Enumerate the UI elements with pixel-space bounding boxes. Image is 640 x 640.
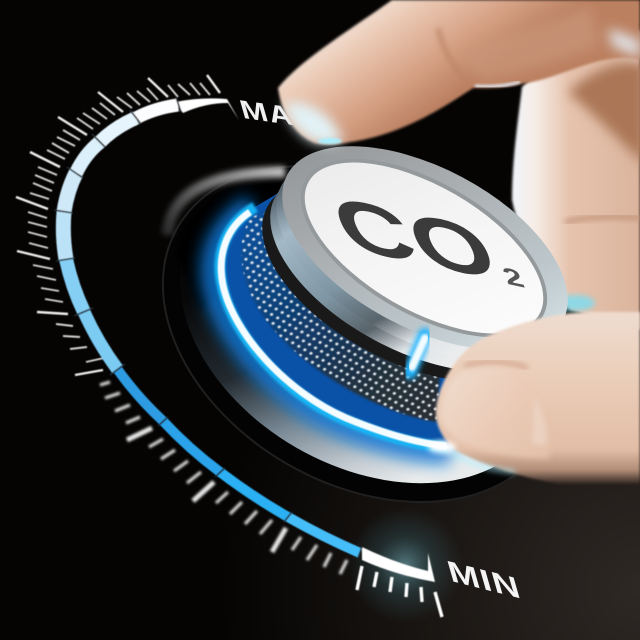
finger underside highlight bbox=[475, 82, 520, 86]
knob bbox=[230, 104, 600, 424]
indicator light glow bbox=[410, 335, 425, 372]
thumb nail bbox=[440, 368, 550, 458]
ring highlight at thumb bbox=[428, 441, 456, 453]
indicator light bbox=[412, 338, 425, 367]
light ring halo bbox=[220, 207, 447, 447]
glow at min end bbox=[347, 507, 463, 623]
palm crease bbox=[565, 217, 640, 222]
palm base bbox=[512, 30, 640, 330]
base outer ring bbox=[103, 98, 621, 570]
dark inset bbox=[176, 178, 290, 310]
nail moon highlight bbox=[532, 396, 546, 445]
subscript 2: 2 bbox=[498, 261, 528, 294]
palm of hand bbox=[512, 30, 640, 330]
finger right shading bbox=[460, 5, 600, 82]
knob dark band bbox=[230, 136, 580, 424]
blue glow bbox=[212, 205, 450, 453]
grey upper rim bbox=[167, 172, 285, 235]
knob rim bbox=[250, 104, 600, 392]
perforated grip base bbox=[241, 200, 440, 422]
cyan glow on palm bbox=[555, 295, 595, 311]
tick marks lower arc bbox=[100, 382, 347, 574]
inner blue field bbox=[220, 180, 470, 447]
arc segments bbox=[54, 97, 435, 582]
finger tip contact light bbox=[318, 138, 342, 144]
perforated grip dots bbox=[241, 200, 440, 422]
thumb bbox=[436, 312, 640, 484]
palm shadow bbox=[568, 63, 640, 165]
thumb cyan glow bbox=[440, 445, 515, 472]
base plate bbox=[125, 109, 605, 547]
gauge scale bbox=[16, 75, 525, 623]
index finger bbox=[278, 0, 640, 144]
finger light patch bbox=[608, 28, 640, 58]
fingers bbox=[278, 0, 640, 484]
tick marks upper arc bbox=[28, 83, 210, 362]
label: MAX: MAX bbox=[236, 95, 320, 135]
CO label: CO bbox=[319, 179, 510, 298]
knob groove bbox=[272, 122, 576, 374]
knob face bbox=[278, 128, 570, 368]
major ticks lower arc bbox=[127, 428, 286, 552]
finger tip glow bbox=[284, 102, 343, 144]
knob silver side bbox=[238, 115, 594, 414]
dial base bbox=[103, 98, 621, 570]
light ring core bbox=[221, 212, 447, 446]
finger knuckle crease bbox=[438, 28, 470, 85]
major ticks upper arc bbox=[16, 75, 220, 375]
thumb crease bbox=[464, 362, 528, 368]
label: MIN: MIN bbox=[443, 554, 525, 606]
bright ticks near min bbox=[357, 566, 442, 617]
